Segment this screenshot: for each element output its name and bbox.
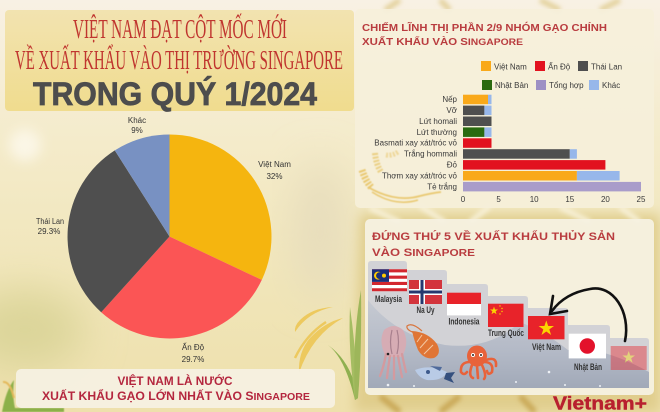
- label: Malaysia: Malaysia: [375, 294, 403, 304]
- slice: Thái Lan: [68, 150, 170, 312]
- legend: Ấn Độ: [548, 62, 571, 72]
- legend: Thái Lan: [591, 62, 622, 72]
- label: Nhật Bản: Nhật Bản: [574, 362, 602, 372]
- heading: rice market share: XUẤT KHẨU VÀO S INGAPORE: [362, 35, 523, 48]
- slice: Ấn Độ: [101, 236, 262, 338]
- legend: Khác: [602, 81, 620, 90]
- slice: Khác: [115, 134, 170, 236]
- callout: largest rice exporter: [16, 369, 335, 408]
- label: Khác value: 9%: [131, 126, 143, 135]
- arrow: rank moved up: [550, 288, 626, 341]
- x axis labels: 0: [461, 195, 466, 204]
- row: Trắng hommali: Trắng hommali: [404, 150, 457, 158]
- row: Tẻ trắng: Tẻ trắng: [427, 182, 457, 192]
- legend: Việt Nam: [494, 62, 527, 72]
- heading: seafood ranking: ĐỨNG THỨ 5 VỀ XUẤT KHẨU THỦY SẢN: [372, 230, 615, 243]
- row: Đỏ: [447, 160, 605, 170]
- row: Tẻ trắng: [427, 182, 641, 192]
- x axis labels: 10: [530, 195, 539, 204]
- x axis labels: 20: [601, 195, 610, 204]
- row: Vỡ: [446, 106, 492, 115]
- flag: Malaysia: [372, 269, 407, 304]
- callout line 2: XUẤT KHẨU GẠO LỚN NHẤT VÀO S INGAPORE: [42, 390, 310, 403]
- rice plant bottom left: [2, 380, 64, 412]
- row: Nếp: Nếp: [442, 95, 458, 104]
- legend: Tổng hợp: [549, 81, 584, 90]
- bar chart: [374, 95, 646, 204]
- heading: rice market share: [362, 21, 607, 48]
- label: Thái Lan value: 29.3%: [38, 227, 60, 236]
- label: Việt Nam: Việt Nam: [532, 342, 561, 352]
- row: Vỡ: Vỡ: [446, 106, 458, 115]
- icon: shrimp: [407, 325, 439, 358]
- label: Khác: Khác: [128, 116, 146, 125]
- x axis labels: 5: [496, 195, 501, 204]
- row: Lứt homali: Lứt homali: [419, 117, 457, 126]
- ranking stairs: [368, 261, 649, 388]
- row: Lứt thường: Lứt thường: [417, 128, 457, 137]
- row: Lứt thường: [417, 127, 492, 137]
- row: Nếp: [442, 95, 492, 104]
- legend: Nhật Bản: [495, 81, 528, 90]
- x axis labels: [461, 195, 646, 204]
- pie chart: rice export share: [36, 116, 291, 364]
- rice plant right of pie: [295, 290, 361, 400]
- title panel: [5, 10, 354, 112]
- row: Basmati: Basmati xay xát/tróc vỏ: [374, 138, 458, 148]
- label: Việt Nam value: 32%: [266, 172, 283, 181]
- row: Lứt homali: [419, 116, 492, 126]
- legend: [481, 61, 622, 90]
- flag: Indonesia: [447, 293, 481, 326]
- row: Đỏ: Đỏ: [447, 160, 458, 170]
- label: Ấn Độ: Ấn Độ: [182, 342, 205, 352]
- panel: rice groups bar chart: [355, 9, 654, 208]
- label: Ấn Độ value: 29.7%: [182, 355, 204, 364]
- slice: Việt Nam: [170, 134, 271, 280]
- label: Na Uy: Na Uy: [416, 305, 434, 315]
- panel: seafood export ranking: [365, 219, 654, 395]
- title line 3: TRONG QUÝ 1/2024: [33, 76, 317, 112]
- title line 2: VỀ XUẤT KHẨU VÀO THỊ TRƯỜNG SINGAPORE: [15, 44, 343, 75]
- ranking water wave: [368, 300, 649, 388]
- water bubbles: [387, 371, 601, 387]
- flag: Việt Nam: [528, 316, 564, 352]
- flag: Nhật Bản: [569, 334, 606, 372]
- flag: Việt Nam faded (previous rank): [611, 346, 647, 370]
- heading: seafood ranking: VÀO S INGAPORE: [372, 246, 475, 259]
- callout line 1: VIỆT NAM LÀ NƯỚC: [118, 375, 232, 388]
- label: Thái Lan: Thái Lan: [36, 217, 64, 226]
- icon: fish: [415, 366, 455, 383]
- flag: China: [488, 304, 524, 338]
- label: Indonesia: Indonesia: [448, 316, 480, 326]
- title line 1: VIỆT NAM ĐẠT CỘT MỐC MỚI: [73, 13, 287, 44]
- x axis labels: 25: [637, 195, 646, 204]
- icon: squid: [380, 326, 406, 379]
- heading: rice market share: CHIẾM LĨNH THỊ PHẦN 2/9 NHÓM GẠO CHÍNH: [362, 21, 607, 34]
- icon: octopus: [461, 346, 496, 379]
- heading: seafood ranking: [372, 230, 615, 259]
- row: Thơm xay xát: [382, 171, 620, 180]
- flag: Norway: [409, 280, 442, 315]
- decorative rice ear: [362, 152, 441, 202]
- row: Trắng hommali: [404, 149, 577, 159]
- row: Thơm xay xát: Thơm xay xát/tróc vỏ: [382, 172, 458, 180]
- label: Việt Nam: Việt Nam: [258, 160, 291, 169]
- label: Trung Quốc: Trung Quốc: [488, 328, 524, 338]
- x axis labels: 15: [565, 195, 575, 204]
- row: Basmati: [374, 138, 492, 148]
